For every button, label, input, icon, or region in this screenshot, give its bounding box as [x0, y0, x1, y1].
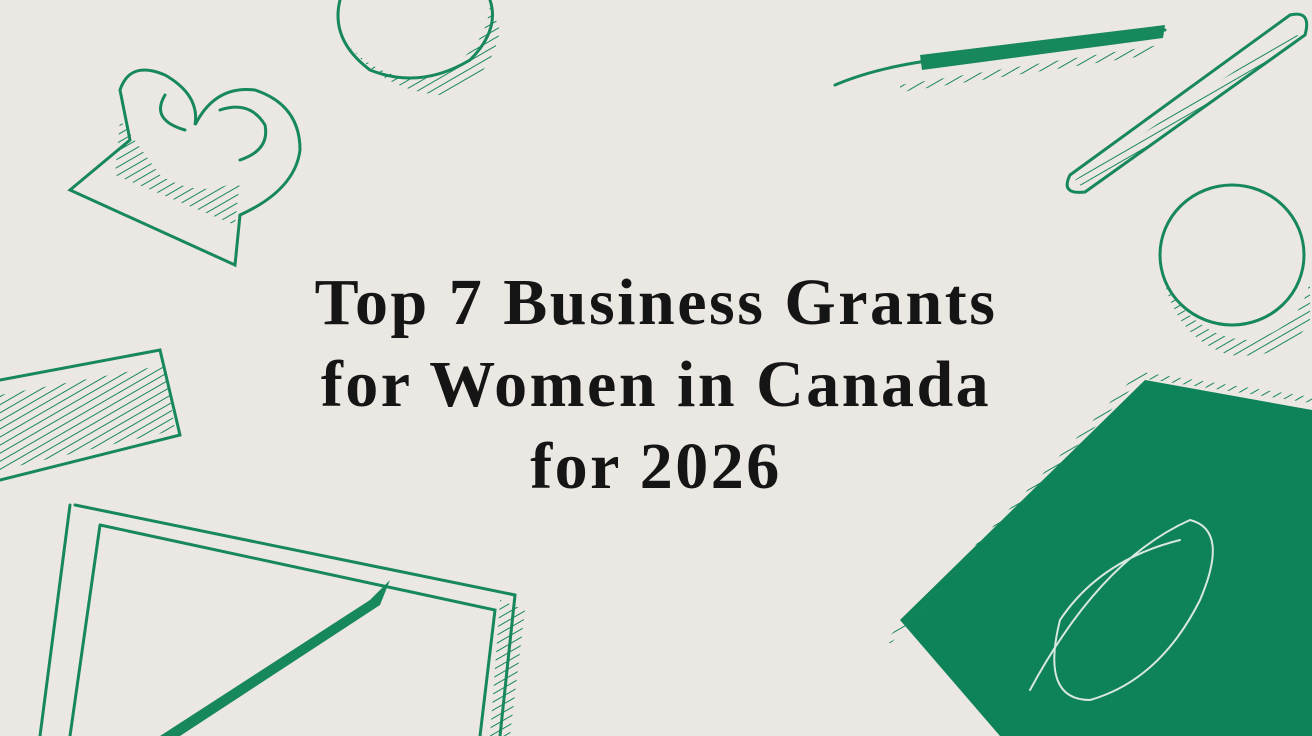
title: for Women in Canada: [321, 348, 991, 421]
title: Top 7 Business Grants: [315, 266, 997, 339]
icon: notebook with pen bottom left: [40, 505, 525, 736]
title: [315, 266, 997, 503]
icon: pen top right: [835, 25, 1165, 92]
icon: tape strip left: [0, 350, 180, 480]
icon: circle top: [338, 0, 500, 95]
icon: green book bottom right: [890, 375, 1312, 736]
icon: circle right: [1160, 185, 1310, 356]
title: for 2026: [530, 430, 782, 503]
icon: ruler right: [1067, 14, 1307, 192]
icon: heart-shaped tape top left: [70, 70, 300, 265]
